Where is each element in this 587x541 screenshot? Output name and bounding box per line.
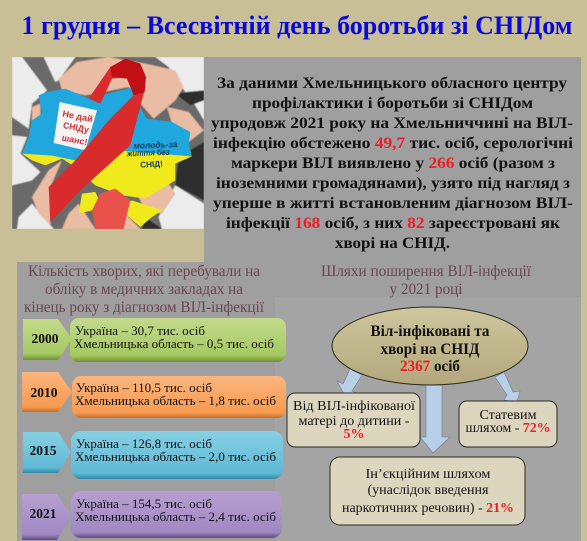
right heading: у 2021 році — [390, 281, 463, 298]
row: 2010: Хмельницька область – 1,8 тис. осіб — [75, 393, 276, 408]
box: sexual route: шляхом - 72% — [466, 421, 550, 436]
left heading — [24, 263, 265, 316]
map: red region — [92, 189, 130, 229]
row: 2015 — [23, 431, 283, 479]
ellipse: total — [332, 307, 528, 385]
box: injection route: Ін’єкційним шляхом — [366, 467, 491, 482]
photo: hands, Ukraine map and red ribbon: Не дай — [62, 108, 94, 124]
box: mother to child: Від ВІЛ-інфікованої — [293, 399, 415, 414]
row: 2010: Україна – 110,5 тис. осіб — [76, 380, 212, 395]
row: 2000: Україна – 30,7 тис. осіб — [75, 323, 205, 338]
right heading: Шляхи поширення ВІЛ-інфекції — [321, 263, 532, 280]
box: injection route: (унаслідок введення — [368, 483, 489, 498]
body text: хворі на СНІД. — [335, 235, 450, 252]
row: 2021: Хмельницька область – 2,4 тис. осіб — [75, 509, 276, 524]
row: 2010: 2010 — [30, 385, 58, 400]
arrow: to sexual route — [495, 372, 520, 402]
left heading: кінець року з діагнозом ВІЛ-інфекції — [24, 299, 265, 316]
box: mother to child: матері до дитини - — [298, 414, 410, 429]
arrow: to mother-to-child route — [337, 369, 362, 396]
row: 2000: Хмельницька область – 0,5 тис. осіб — [74, 336, 274, 351]
right heading — [321, 263, 532, 298]
map: yellow — [22, 151, 192, 199]
photo: hands, Ukraine map and red ribbon: СНІД! — [140, 158, 163, 170]
body text: упродовж 2021 року на Хмельниччині на ВІЛ- — [211, 115, 573, 132]
box: sexual route — [459, 401, 557, 447]
photo: hands, Ukraine map and red ribbon — [12, 57, 204, 229]
row: 2000: 2000 — [32, 331, 59, 346]
photo: hands, Ukraine map and red ribbon: шанс! — [61, 132, 88, 147]
row: 2021 — [22, 491, 282, 540]
photo: hands, Ukraine map and red ribbon: СНІДу — [62, 120, 90, 135]
left heading: обліку в медичних закладах на — [45, 281, 243, 298]
body text: профілактики і боротьби зі СНІДом — [252, 95, 533, 112]
row: 2015: Хмельницька область – 2,0 тис. осіб — [75, 449, 276, 464]
title: 1 грудня – Всесвітній день боротьби зі СНІДом — [22, 11, 572, 40]
body text — [211, 75, 574, 252]
body text: інфекції 168 осіб, з них 82 зареєстровані як — [226, 215, 560, 232]
row: 2015: Україна – 126,8 тис. осіб — [76, 436, 212, 451]
sign — [54, 102, 97, 150]
box: injection route — [330, 457, 525, 525]
map slogan: молодь-за — [133, 139, 178, 151]
body text: іноземними громадянами), узято під нагляд з — [216, 175, 570, 192]
panel: routes backdrop — [275, 297, 581, 541]
row: 2015: 2015 — [30, 443, 57, 458]
photo: hands, Ukraine map and red ribbon: життя без — [126, 147, 170, 158]
row: 2021: 2021 — [30, 506, 57, 521]
body text: інфекцію обстежено 49,7 тис. осіб, серологічні — [213, 135, 574, 152]
ribbon — [88, 67, 120, 104]
row: 2000 — [23, 318, 286, 362]
body text: За даними Хмельницького обласного центру — [217, 75, 567, 92]
body text: уперше в житті встановленим діагнозом ВІЛ- — [213, 195, 573, 212]
box: mother to child — [287, 393, 420, 447]
ellipse: total: Віл-інфіковані та — [370, 323, 490, 340]
row: 2010 — [22, 372, 286, 418]
box: sexual route: Статевим — [480, 408, 537, 423]
left heading: Кількість хворих, які перебували на — [28, 263, 260, 280]
row: 2021: Україна – 154,5 тис. осіб — [76, 496, 212, 511]
ellipse: total: хворі на СНІД — [380, 341, 480, 358]
box: injection route: наркотичних речовин) - 21% — [342, 501, 514, 516]
arrow: to injection route — [420, 380, 450, 453]
box: mother to child: 5% — [344, 427, 364, 442]
ellipse: total: 2367 осіб — [400, 358, 460, 375]
body text: маркери ВІЛ виявлено у 266 осіб (разом з — [231, 155, 555, 172]
map: blue — [22, 88, 192, 162]
